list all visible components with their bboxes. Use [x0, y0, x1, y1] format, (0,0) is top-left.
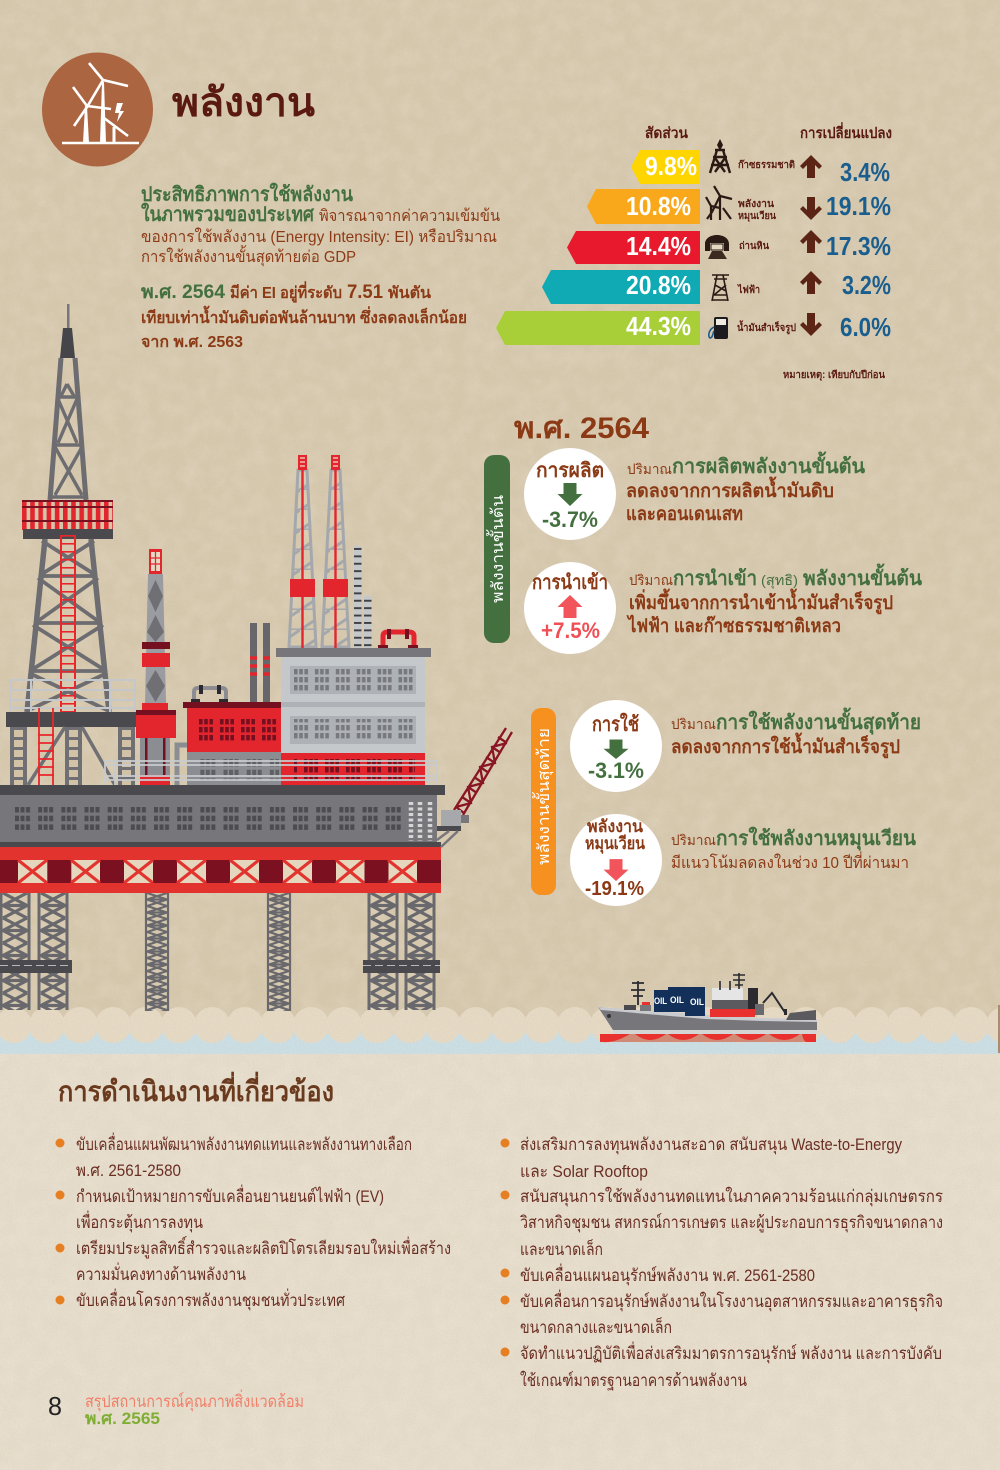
text: consumption: การใช้พลังงานขั้นสุดท้าย — [716, 707, 921, 735]
footer: page number and publication: สรุปสถานการณ์คุณภาพสิ่งแวดล้อม — [85, 1389, 304, 1412]
list: actions right column: จัดทำแนวปฏิบัติเพื่อส่งเสริมมาตรการอนุรักษ์ พลังงาน และการบังคับ — [520, 1341, 942, 1364]
row: renewable energy: 10.8% — [626, 191, 691, 221]
red truss band — [0, 847, 441, 893]
side label: primary energy: พลังงานขั้นต้น — [486, 495, 507, 603]
red module with pipe — [183, 685, 281, 785]
deck railing — [105, 760, 437, 785]
chimneys — [250, 623, 270, 703]
left railing and substructure — [6, 680, 139, 785]
text: consumption: ปริมาณ — [671, 716, 716, 732]
icon: wind turbines in brown circle — [42, 52, 153, 166]
text block: energy intensity: พ.ศ. 2564 — [141, 282, 225, 303]
badge: import: การนำเข้า — [532, 571, 608, 594]
row: electricity: 20.8% — [626, 270, 691, 300]
column headers: สัดส่วน — [645, 125, 689, 142]
row: natural gas: 3.4% — [840, 157, 890, 187]
list: actions left column: ขับเคลื่อนแผนพัฒนาพลังงานทดแทนและพลังงานทางเลือก — [76, 1132, 412, 1154]
heading: related actions: การดำเนินงานที่เกี่ยวข้อง — [58, 1071, 334, 1107]
badge: renewable: -19.1% — [585, 878, 644, 900]
row: renewable energy — [587, 186, 891, 224]
panel: final energy — [531, 700, 921, 906]
list: actions left column: เพื่อกระตุ้นการลงทุน — [76, 1210, 203, 1233]
list: actions left column: เตรียมประมูลสิทธิ์สำรวจและผลิตปิโตรเลียมรอบใหม่เพื่อสร้าง — [76, 1236, 451, 1259]
list: actions left column: ขับเคลื่อนโครงการพลังงานชุมชนทั่วประเทศ — [76, 1288, 345, 1311]
row: coal: ถ่านหิน — [739, 240, 769, 252]
row: natural gas — [631, 139, 890, 187]
list: actions right column: ขับเคลื่อนแผนอนุรักษ์พลังงาน พ.ศ. 2561-2580 — [520, 1263, 815, 1286]
row: refined oil — [496, 311, 891, 345]
badge: renewable: พลังงาน — [587, 817, 643, 836]
list: actions right column: และขนาดเล็ก — [520, 1238, 603, 1259]
panel: primary energy — [484, 448, 922, 654]
heading: year 2564: พ.ศ. 2564 — [514, 412, 649, 445]
column headers — [645, 122, 892, 142]
side label: final energy — [531, 708, 556, 895]
text: renewable: ปริมาณ — [671, 832, 716, 848]
water waves — [0, 1007, 1000, 1054]
row: renewable energy: หมุนเวียน — [738, 210, 776, 222]
text block: energy intensity: ของการใช้พลังงาน (Energy Intensity: EI) หรือปริมาณ — [141, 227, 497, 246]
main derrick — [22, 304, 113, 712]
text: import: การนำเข้า — [673, 567, 757, 590]
list: actions left column — [56, 1132, 451, 1311]
text block: energy intensity: การใช้พลังงานขั้นสุดท้ายต่อ GDP — [141, 245, 356, 267]
side label: primary energy — [484, 455, 510, 643]
row: refined oil: 44.3% — [626, 311, 691, 341]
badge: consumption: -3.1% — [588, 758, 644, 783]
text block: energy intensity: จาก พ.ศ. 2563 — [141, 334, 243, 351]
text: production: ลดลงจากการผลิตน้ำมันดิบ — [626, 476, 834, 502]
text: production: การผลิตพลังงานขั้นต้น — [672, 451, 865, 478]
row: renewable energy: พลังงาน — [738, 198, 774, 210]
row: coal: 17.3% — [826, 231, 891, 261]
small tower and red module — [136, 549, 187, 785]
side label: final energy: พลังงานขั้นสุดท้าย — [532, 728, 554, 865]
badge: production — [524, 448, 616, 540]
text: production: ปริมาณ — [627, 461, 672, 477]
column headers: การเปลี่ยนแปลง — [800, 122, 892, 142]
list: actions left column: กำหนดเป้าหมายการขับเคลื่อนยานยนต์ไฟฟ้า (EV) — [76, 1184, 384, 1206]
text: production: และคอนเดนเสท — [626, 504, 743, 525]
oil drums: OIL — [670, 995, 684, 1005]
title: พลังงาน — [172, 81, 315, 125]
text block: energy intensity — [141, 182, 500, 351]
badge: import: +7.5% — [541, 618, 600, 643]
footer: page number and publication: พ.ศ. 2565 — [85, 1409, 160, 1428]
text block: energy intensity: เทียบเท่าน้ำมันดิบต่อพันล้านบาท ซึ่งลดลงเล็กน้อย — [141, 305, 467, 327]
row: refined oil: 6.0% — [840, 312, 891, 342]
text block: energy intensity: พันตัน — [388, 284, 431, 302]
text: renewable: มีแนวโน้มลดลงในช่วง 10 ปีที่ผ่านมา — [671, 851, 909, 872]
accommodation block — [276, 648, 431, 785]
footer: page number and publication: 8 — [48, 1391, 62, 1421]
row: natural gas: 9.8% — [645, 151, 697, 181]
oil drums — [654, 987, 705, 1016]
list: actions right column — [500, 1135, 943, 1391]
text: renewable — [671, 826, 916, 872]
text: import: เพิ่มขึ้นจากการนำเข้าน้ำมันสำเร็จรูป — [629, 588, 893, 615]
text block: energy intensity: พิจารณาจากค่าความเข้มข้น — [319, 207, 500, 225]
badge: production: การผลิต — [536, 460, 604, 482]
list: actions right column: ส่งเสริมการลงทุนพลังงานสะอาด สนับสนุน Waste-to-Energy — [520, 1135, 902, 1155]
oil drums: OIL — [690, 997, 704, 1007]
list: actions right column: ขนาดกลางและขนาดเล็ก — [520, 1316, 672, 1337]
illustration: offshore oil platform — [0, 304, 512, 1011]
text block: energy intensity: 7.51 — [347, 282, 383, 303]
badge: renewable: หมุนเวียน — [585, 833, 645, 854]
badge: consumption — [570, 700, 662, 792]
text block: energy intensity: ประสิทธิภาพการใช้พลังงาน — [141, 182, 353, 206]
text: production — [626, 451, 865, 525]
text: import: ไฟฟ้า และก๊าซธรรมชาติเหลว — [626, 614, 841, 637]
footer: page number and publication — [48, 1389, 304, 1428]
badge: consumption: การใช้ — [592, 712, 639, 736]
crane arm — [437, 728, 512, 847]
chart note: หมายเหตุ: เทียบกับปีก่อน — [783, 369, 885, 381]
badge: import — [524, 562, 616, 654]
text: consumption — [671, 707, 921, 759]
text: import: (สุทธิ) — [761, 572, 798, 589]
list: actions left column: พ.ศ. 2561-2580 — [76, 1161, 181, 1180]
row: electricity: 3.2% — [842, 270, 891, 300]
row: coal — [567, 230, 891, 264]
text: import: ปริมาณ — [629, 572, 673, 588]
illustration: oil tanker — [598, 973, 817, 1042]
badge: production: -3.7% — [542, 507, 598, 532]
text block: energy intensity: มีค่า EI อยู่ที่ระดับ — [230, 281, 342, 304]
support legs — [0, 893, 440, 1011]
row: coal: 14.4% — [626, 231, 691, 261]
red pipe on roof — [378, 629, 418, 649]
text: renewable: การใช้พลังงานหมุนเวียน — [716, 826, 916, 851]
text block: energy intensity: ในภาพรวมของประเทศ — [141, 202, 315, 226]
list: actions right column: และ Solar Rooftop — [520, 1162, 648, 1181]
list: actions right column: ใช้เกณฑ์มาตรฐานอาคารด้านพลังงาน — [520, 1370, 747, 1391]
text: import — [626, 563, 922, 637]
text: consumption: ลดลงจากการใช้น้ำมันสำเร็จรูป — [671, 732, 900, 759]
badge: renewable — [570, 814, 662, 906]
list: actions right column: สนับสนุนการใช้พลังงานทดแทนในภาคความร้อนแก่กลุ่มเกษตรกร — [520, 1186, 943, 1207]
row: refined oil: น้ำมันสำเร็จรูป — [737, 320, 796, 335]
row: natural gas: ก๊าซธรรมชาติ — [738, 159, 795, 171]
row: electricity: ไฟฟ้า — [737, 283, 760, 296]
hull deck — [0, 785, 445, 847]
text: import: พลังงานขั้นต้น — [803, 563, 922, 590]
chart: energy share and change — [496, 122, 892, 381]
row: electricity — [542, 270, 891, 304]
list: actions left column: ความมั่นคงทางด้านพลังงาน — [76, 1262, 246, 1284]
row: renewable energy: 19.1% — [826, 191, 891, 221]
twin flare towers — [289, 455, 372, 648]
oil drums: OIL — [654, 996, 667, 1006]
